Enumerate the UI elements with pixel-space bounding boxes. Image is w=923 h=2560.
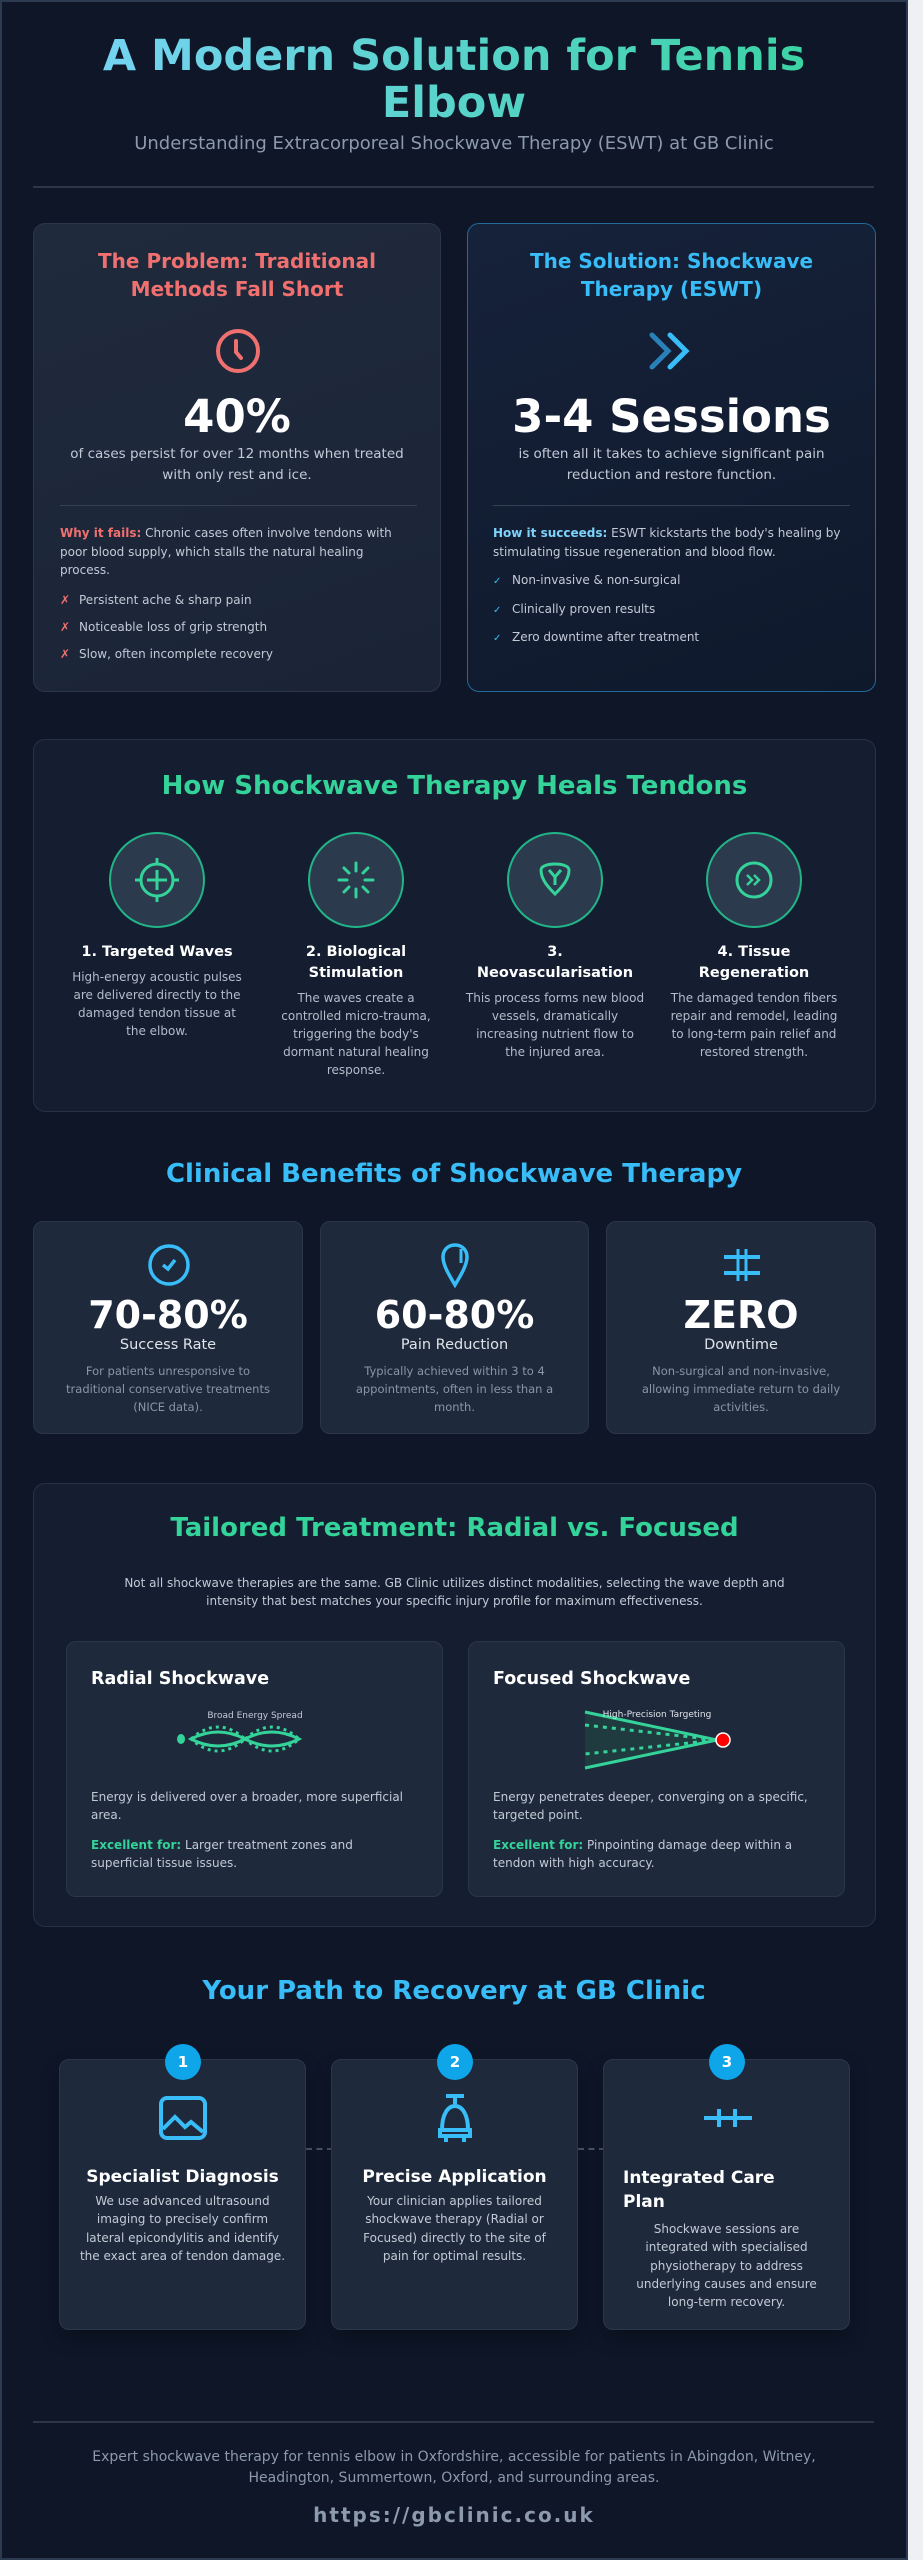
panel: problem (33, 223, 441, 692)
how it succeeds: How it succeeds: ESWT kickstarts the body's healing by (493, 526, 840, 540)
card: success rate: Success Rate (120, 1337, 216, 1353)
card: zero downtime: Downtime (704, 1337, 778, 1353)
card: focused: tendon with high accuracy. (493, 1856, 655, 1870)
title: A Modern Solution for Tennis (103, 31, 805, 81)
problem heading (98, 249, 376, 301)
heading: path to recovery: Your Path to Recovery at GB Clinic (202, 1976, 706, 2006)
step 3: vessels, dramatically (492, 1009, 618, 1023)
how it succeeds: stimulating tissue regeneration and blood flow. (493, 544, 776, 558)
solution heading: Therapy (ESWT) (581, 277, 762, 301)
heading: clinical benefits: Clinical Benefits of Shockwave Therapy (166, 1159, 742, 1189)
benefits list: Clinically proven results (512, 602, 655, 616)
badge 3: 3 (722, 2053, 732, 2071)
step 1: the elbow. (126, 1024, 188, 1038)
failure list: ✗ (60, 593, 70, 607)
stat description: with only rest and ice. (162, 467, 312, 483)
footer text: Expert shockwave therapy for tennis elbow in Oxfordshire, accessible for patients in Abingdon, Witney, (92, 2449, 816, 2465)
icon: drop (441, 1243, 469, 1288)
footer text: Headington, Summertown, Oxford, and surrounding areas. (248, 2470, 660, 2486)
step 4: to long-term pain relief and (672, 1027, 836, 1041)
stat description: reduction and restore function. (567, 467, 776, 483)
failure list: ✗ (60, 647, 70, 661)
step 4: The damaged tendon fibers (671, 991, 837, 1005)
step 4: repair and remodel, leading (671, 1009, 837, 1023)
problem heading: The Problem: Traditional (98, 249, 376, 273)
card: radial: Energy is delivered over a broader, more superficial (91, 1790, 403, 1804)
card: focused: Energy penetrates deeper, converging on a specific, (493, 1790, 808, 1804)
focused cone diagram (584, 1710, 731, 1770)
step card 2: Precise Application (362, 2167, 547, 2187)
step card 2: Focused) directly to the site of (363, 2231, 546, 2245)
step card 1: Specialist Diagnosis (86, 2167, 279, 2187)
badge 1 (165, 2044, 201, 2080)
step 2 (281, 832, 431, 1077)
title: Elbow (382, 78, 526, 128)
step card 2: pain for optimal results. (383, 2249, 526, 2263)
card: focused: targeted point. (493, 1808, 583, 1822)
step 2: controlled micro-trauma, (281, 1009, 431, 1023)
step 3: the injured area. (505, 1045, 605, 1059)
card: radial: Radial Shockwave (91, 1669, 269, 1689)
icon: image (159, 2096, 207, 2140)
why it fails: Why it fails: Chronic cases often involve tendons with (60, 526, 392, 540)
step 4: 4. Tissue (718, 944, 790, 960)
step 2: triggering the body's (293, 1027, 419, 1041)
solution heading: The Solution: Shockwave (530, 249, 813, 273)
step 2: The waves create a (297, 991, 415, 1005)
step 3 (466, 832, 644, 1059)
failure list: Noticeable loss of grip strength (79, 620, 267, 634)
step card 3: physiotherapy to address (650, 2259, 803, 2273)
benefits list: Zero downtime after treatment (512, 630, 699, 644)
step 1: are delivered directly to the (74, 988, 240, 1002)
step card 3: Shockwave sessions are (654, 2222, 799, 2236)
card: focused (468, 1641, 845, 1897)
step card 3: Integrated Care (623, 2168, 775, 2188)
step 4: Regeneration (699, 965, 809, 981)
panel: solution (467, 223, 876, 692)
icon: vessel (507, 832, 603, 928)
benefits list: ✓ (493, 604, 501, 616)
step 3: Neovascularisation (477, 965, 633, 981)
step 3: 3. (547, 944, 563, 960)
radial wave diagram: Broad Energy Spread (207, 1711, 303, 1721)
step card 1: lateral epicondylitis and identify (86, 2231, 279, 2245)
stat sessions: 3-4 Sessions (512, 390, 831, 443)
icon: target (109, 832, 205, 928)
step card 3: underlying causes and ensure (636, 2277, 817, 2291)
why it fails (60, 526, 392, 577)
benefits list: Non-invasive & non-surgical (512, 573, 680, 587)
card: zero downtime: allowing immediate return to daily (642, 1382, 840, 1396)
step 1: 1. Targeted Waves (81, 944, 233, 960)
card: success rate (33, 1221, 303, 1434)
problem heading: Methods Fall Short (131, 277, 343, 301)
heading: heals: How Shockwave Therapy Heals Tendons (162, 771, 747, 801)
stat description: is often all it takes to achieve significant pain (518, 446, 825, 462)
icon: forward circle (706, 832, 802, 928)
icon: burst (308, 832, 404, 928)
step card 2 (331, 2059, 578, 2330)
icon: clock (216, 329, 260, 373)
step card 3: long-term recovery. (668, 2295, 785, 2309)
card: zero downtime (606, 1221, 876, 1434)
card: pain reduction (320, 1221, 589, 1434)
step 2: dormant natural healing (283, 1045, 429, 1059)
step 2: Stimulation (309, 965, 403, 981)
card: pain reduction: month. (434, 1400, 475, 1414)
card: success rate: (NICE data). (133, 1400, 203, 1414)
panel: how it heals (33, 739, 876, 1112)
step 3: This process forms new blood (466, 991, 644, 1005)
step 4 (670, 832, 837, 1059)
radial wave diagram (177, 1711, 303, 1752)
why it fails: poor blood supply, which stalls the natural healing (60, 544, 364, 558)
step card 3: integrated with specialised (645, 2240, 808, 2254)
step 1 (72, 832, 242, 1038)
panel: radial vs focused (33, 1483, 876, 1927)
card: radial: Excellent for: Larger treatment zones and (91, 1838, 353, 1852)
badge 2: 2 (450, 2053, 460, 2071)
failure list: ✗ (60, 620, 70, 634)
benefits list (493, 573, 699, 644)
step card 1: imaging to precisely confirm (97, 2212, 268, 2226)
stat description (70, 446, 404, 483)
subtitle: Understanding Extracorporeal Shockwave Therapy (ESWT) at GB Clinic (134, 133, 774, 154)
step 3: increasing nutrient flow to (476, 1027, 634, 1041)
badge 2 (437, 2044, 473, 2080)
card: zero downtime: ZERO (683, 1293, 799, 1337)
card: radial: area. (91, 1808, 122, 1822)
footer url: https://gbclinic.co.uk (313, 2503, 595, 2527)
solution heading (530, 249, 813, 301)
failure list: Persistent ache & sharp pain (79, 593, 252, 607)
failure list: Slow, often incomplete recovery (79, 647, 273, 661)
step card 2: shockwave therapy (Radial or (365, 2212, 544, 2226)
step 4: restored strength. (700, 1045, 808, 1059)
title (2, 33, 906, 127)
step card 1 (59, 2059, 306, 2330)
step card 3: Plan (623, 2192, 665, 2212)
card: pain reduction: Typically achieved within 3 to 4 (364, 1364, 545, 1378)
step card 2: Your clinician applies tailored (367, 2194, 542, 2208)
card: radial: superficial tissue issues. (91, 1856, 237, 1870)
failure list (60, 593, 273, 661)
card: zero downtime: Non-surgical and non-invasive, (652, 1364, 830, 1378)
icon: bars (724, 1249, 760, 1281)
card: pain reduction: 60-80% (375, 1293, 534, 1337)
stat description (518, 446, 825, 483)
footer text (92, 2449, 816, 2486)
card: success rate: traditional conservative treatments (66, 1382, 270, 1396)
icon: check circle (148, 1244, 190, 1286)
card: success rate: 70-80% (88, 1293, 248, 1337)
intro text: Not all shockwave therapies are the same. GB Clinic utilizes distinct modalities, selecting the wave depth and (124, 1576, 785, 1590)
step 2: 2. Biological (306, 944, 406, 960)
benefits list: ✓ (493, 576, 501, 587)
card: zero downtime: activities. (713, 1400, 769, 1414)
icon: applicator (438, 2094, 472, 2142)
card: focused: Excellent for: Pinpointing damage deep within a (493, 1838, 792, 1852)
stat description: of cases persist for over 12 months when treated (70, 446, 404, 462)
step 1: damaged tendon tissue at (78, 1006, 236, 1020)
focused cone diagram: High-Precision Targeting (603, 1710, 711, 1720)
how it succeeds (493, 526, 840, 558)
benefits list: ✓ (493, 633, 501, 644)
step 2: response. (327, 1063, 385, 1077)
card: radial (66, 1641, 443, 1897)
step 1: High-energy acoustic pulses (72, 970, 242, 984)
badge 3 (709, 2044, 745, 2080)
step card 1: We use advanced ultrasound (95, 2194, 270, 2208)
intro text (124, 1576, 785, 1608)
why it fails: process. (60, 563, 110, 577)
stat 40%: 40% (183, 390, 291, 443)
step card 3 (603, 2059, 850, 2330)
icon: integrated bars (704, 2109, 752, 2127)
card: pain reduction: appointments, often in less than a (356, 1382, 553, 1396)
card: focused: Focused Shockwave (493, 1669, 690, 1689)
card: success rate: For patients unresponsive to (86, 1364, 250, 1378)
heading: tailored: Tailored Treatment: Radial vs. Focused (170, 1513, 739, 1543)
icon: chevrons (650, 332, 690, 370)
badge 1: 1 (178, 2053, 188, 2071)
card: pain reduction: Pain Reduction (401, 1337, 508, 1353)
step card 1: the exact area of tendon damage. (80, 2249, 285, 2263)
intro text: intensity that best matches your specific injury profile for maximum effectiveness. (206, 1594, 703, 1608)
